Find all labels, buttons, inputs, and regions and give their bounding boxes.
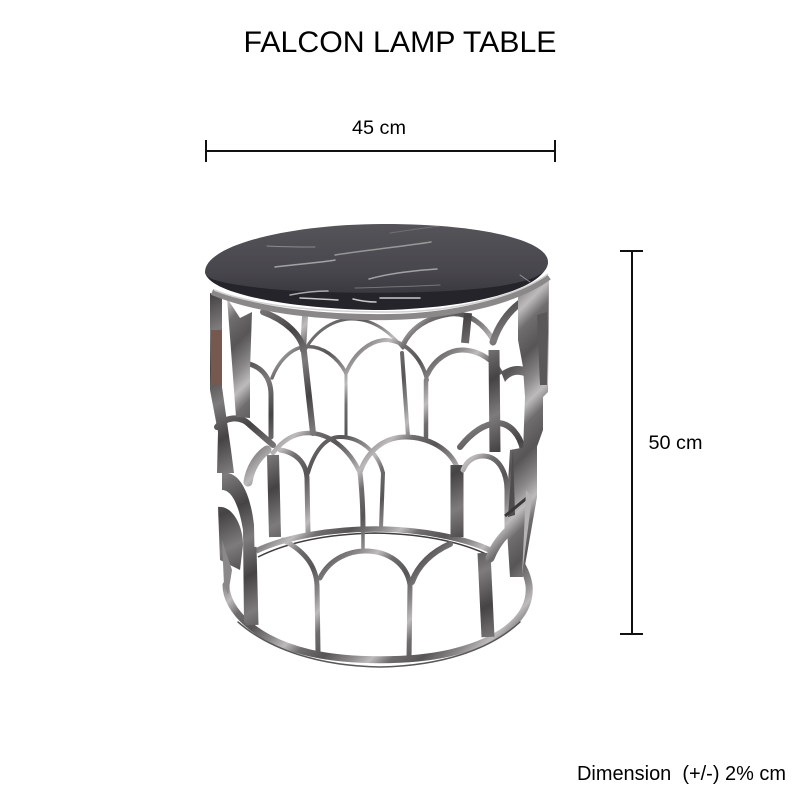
top support ring (212, 274, 549, 317)
title: FALCON LAMP TABLE (244, 26, 556, 59)
middle ring (256, 529, 492, 557)
height dimension: 50 cm (620, 251, 702, 634)
marble tabletop (205, 224, 548, 310)
marble veins (267, 226, 530, 302)
base ring (226, 552, 529, 667)
middle tier arches (248, 433, 507, 537)
left side posts (210, 293, 256, 623)
right side posts (501, 276, 549, 577)
height dimension: 50 cm: 50 cm (648, 432, 702, 454)
product illustration: lamp table (205, 224, 549, 667)
width dimension: 45 cm: 45 cm (352, 117, 406, 139)
upper tier arches (217, 303, 523, 452)
width dimension: 45 cm (206, 117, 555, 162)
bottom tier arches (250, 517, 527, 658)
dimension tolerance note: Dimension (+/-) 2% cm (577, 763, 786, 785)
